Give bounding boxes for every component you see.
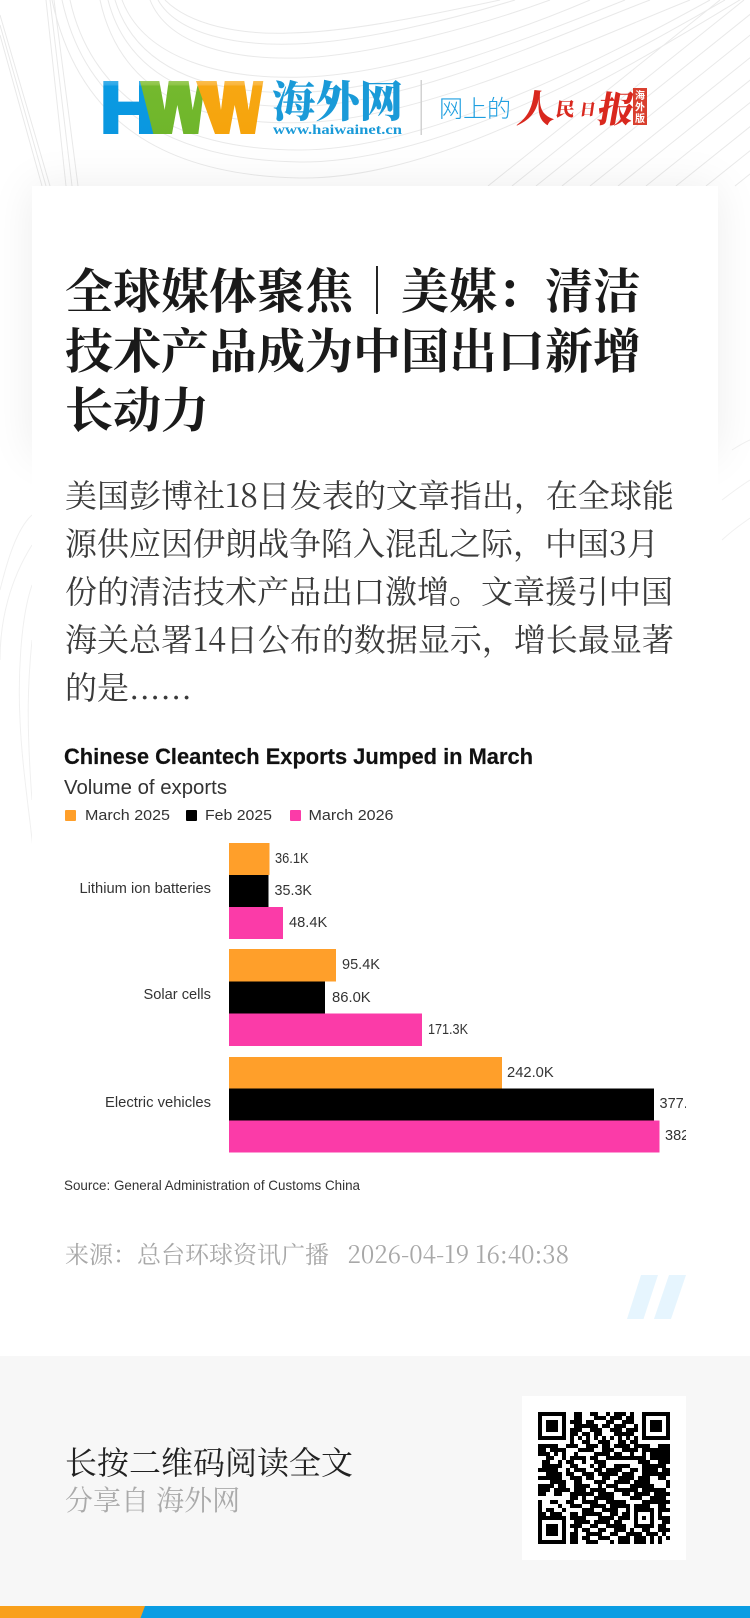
bar chart: Chinese cleantech exports [64, 748, 686, 1190]
body text [65, 470, 674, 709]
legend: March 2025 [85, 807, 170, 824]
logo url: www.haiwainet.cn [273, 123, 402, 138]
title: 长动力 [65, 372, 209, 441]
group: solar cells: Solar cells [144, 987, 211, 1003]
QR code [522, 1396, 686, 1560]
group: solar cells: 86.0K [332, 990, 371, 1006]
group: lithium ion batteries [80, 843, 328, 939]
tagline: 网上的 [439, 89, 511, 124]
body text: 的是...... [65, 663, 192, 709]
group: solar cells: 95.4K [342, 957, 380, 973]
group: lithium ion batteries: 35.3K [274, 883, 312, 899]
legend: Feb 2025 [205, 807, 272, 824]
title: 技术产品成为中国出口新增 [65, 312, 641, 382]
source and timestamp: 来源：总台环球资讯广播 2026-04-19 16:40:38 [65, 1235, 569, 1270]
logo header [103, 70, 647, 138]
group: electric vehicles: 382 [665, 1128, 689, 1144]
legend: March 2026 [308, 807, 394, 824]
title [65, 253, 641, 441]
chart title: Chinese Cleantech Exports Jumped in March [64, 744, 533, 769]
title: 全球媒体聚焦｜美媒：清洁 [65, 253, 641, 322]
group: electric vehicles: Electric vehicles [105, 1095, 211, 1111]
legend [65, 809, 393, 821]
group: solar cells [144, 949, 468, 1046]
body text: 美国彭博社18日发表的文章指出，在全球能 [65, 470, 674, 516]
overseas edition stamp: 外 [635, 98, 645, 114]
people's daily wordmark: 人 [514, 78, 560, 133]
group: lithium ion batteries: Lithium ion batteries [80, 881, 211, 897]
group: electric vehicles: 242.0K [507, 1065, 554, 1081]
group: electric vehicles: 377. [660, 1096, 688, 1112]
body text: 份的清洁技术产品出口激增。文章援引中国 [65, 567, 673, 613]
overseas edition stamp [633, 87, 647, 125]
chart source: Source: General Administration of Customs China [64, 1177, 360, 1193]
group: lithium ion batteries: 48.4K [289, 915, 328, 931]
share note: 分享自 海外网 [65, 1479, 240, 1519]
group: lithium ion batteries: 36.1K [275, 851, 309, 867]
bottom colour bar [0, 1606, 750, 1618]
people's daily wordmark: 民 [554, 95, 577, 122]
icon: HWW letters [103, 81, 263, 134]
chart subtitle: Volume of exports [64, 777, 227, 799]
body text: 源供应因伊朗战争陷入混乱之际，中国3月 [65, 519, 659, 565]
group: solar cells: 171.3K [428, 1022, 468, 1038]
group: electric vehicles [105, 1057, 689, 1152]
panel: article card [32, 186, 718, 1356]
people's daily wordmark [514, 78, 639, 133]
body text: 海关总署14日公布的数据显示，增长最显著 [65, 615, 674, 661]
panel: footer [0, 1356, 750, 1606]
decorative slashes [627, 1275, 686, 1319]
logo wordmark: 海外网 [272, 70, 403, 130]
overseas edition stamp: 海 [635, 87, 645, 102]
people's daily wordmark: 日 [578, 97, 598, 120]
people's daily wordmark: 报 [594, 81, 639, 133]
call to action: 长按二维码阅读全文 [65, 1438, 353, 1484]
overseas edition stamp: 版 [635, 110, 645, 125]
